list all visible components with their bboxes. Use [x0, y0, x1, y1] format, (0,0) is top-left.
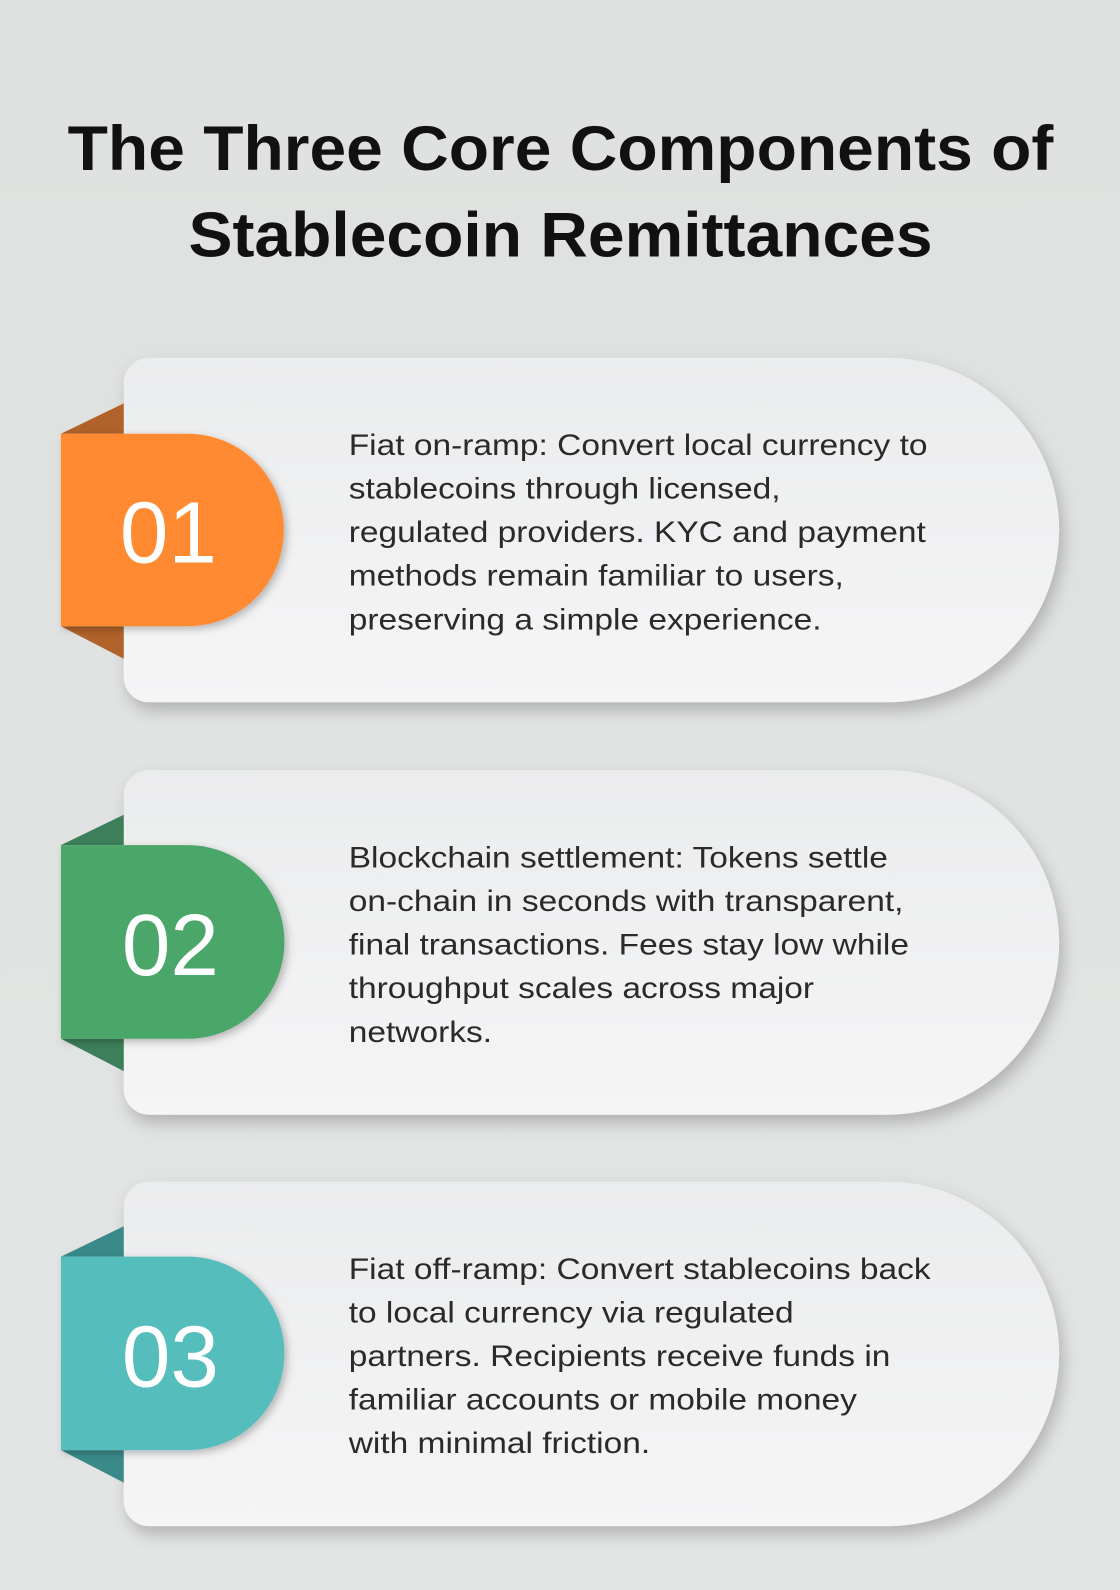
text: blockchain settlement: final transactions. Fees stay low while — [349, 928, 909, 961]
panel: step 01 — [61, 358, 1059, 702]
title — [68, 114, 1054, 270]
text: fiat off-ramp — [348, 1252, 931, 1460]
text: blockchain settlement: Blockchain settlement: Tokens settle — [349, 840, 888, 874]
text: fiat on-ramp: Fiat on-ramp: Convert local currency to — [349, 428, 928, 462]
text: blockchain settlement — [349, 840, 909, 1048]
title: Stablecoin Remittances — [188, 200, 933, 270]
text: fiat on-ramp: stablecoins through licensed, — [349, 472, 781, 505]
text: fiat off-ramp: with minimal friction. — [348, 1426, 650, 1460]
text: blockchain settlement: on-chain in seconds with transparent, — [349, 884, 903, 918]
text: fiat on-ramp: preserving a simple experience. — [349, 602, 822, 636]
badge: 02: 02 — [122, 897, 219, 994]
text: fiat off-ramp: to local currency via regulated — [349, 1295, 794, 1329]
panel: step 03 — [61, 1182, 1059, 1526]
text: blockchain settlement: throughput scales across major — [349, 971, 814, 1005]
badge: 02 — [61, 845, 284, 1039]
badge: 01 — [61, 434, 284, 626]
text: fiat off-ramp: partners. Recipients receive funds in — [349, 1339, 890, 1373]
badge: 03 — [61, 1257, 284, 1450]
badge: 01: 01 — [120, 484, 217, 581]
text: fiat off-ramp: familiar accounts or mobile money — [349, 1383, 857, 1416]
text: fiat on-ramp — [349, 428, 928, 636]
text: fiat on-ramp: regulated providers. KYC and payment — [349, 515, 926, 549]
text: fiat off-ramp: Fiat off-ramp: Convert stablecoins back — [349, 1252, 931, 1285]
panel: step 02 — [61, 770, 1059, 1115]
title: The Three Core Components of — [68, 114, 1054, 184]
badge: 03: 03 — [122, 1308, 219, 1405]
text: blockchain settlement: networks. — [349, 1015, 492, 1048]
text: fiat on-ramp: methods remain familiar to users, — [349, 559, 844, 592]
